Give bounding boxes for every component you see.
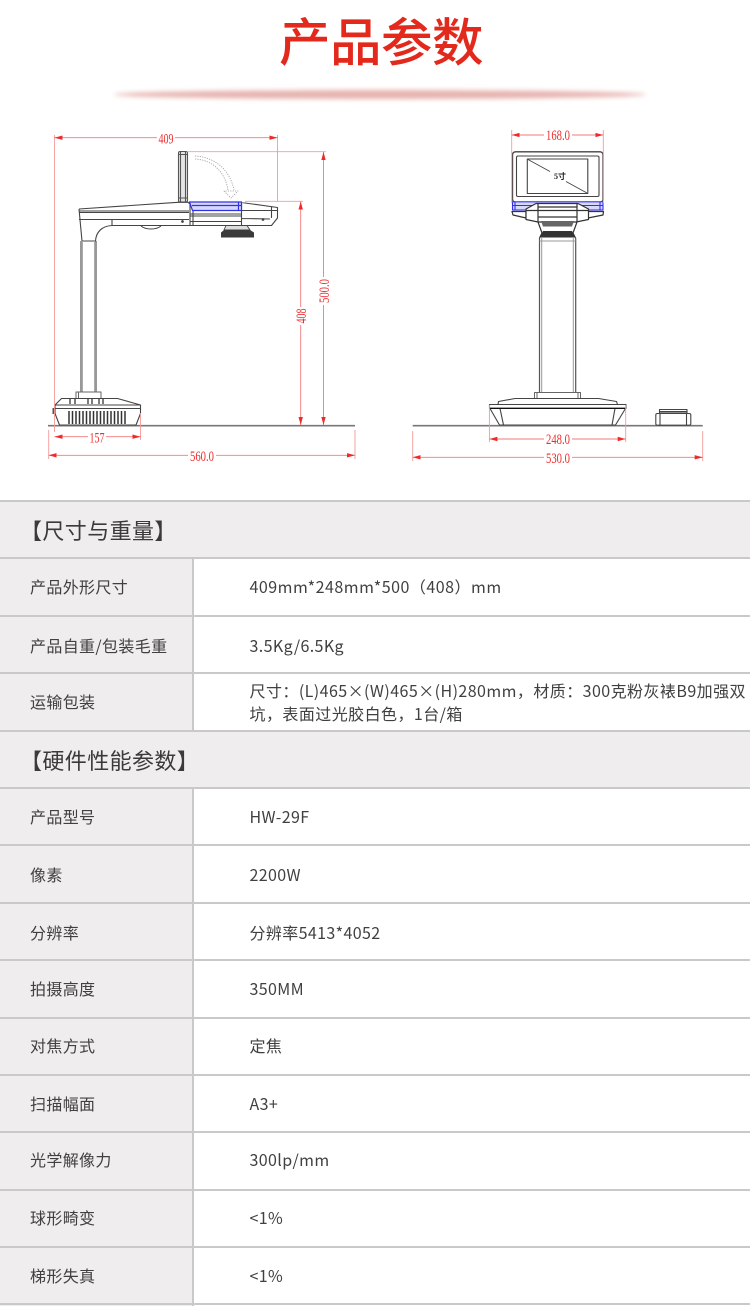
row: product dimensions: 409mm*248mm*500（408）mm (250, 574, 502, 598)
row: pixels: 2200W (250, 862, 301, 886)
row: weight: 3.5Kg/6.5Kg (250, 633, 344, 657)
row: optical resolution (0, 1131, 750, 1190)
row: pixels: 像素 (30, 862, 63, 886)
title: 产品参数 (279, 1, 483, 76)
table bottom edge (0, 1303, 750, 1306)
side view: blue highlighted hinge (190, 202, 242, 210)
front view drawing (413, 128, 703, 467)
dimension 168.0: 168.0 (546, 128, 570, 144)
front view: camera head (512, 204, 604, 238)
row: optical resolution: 光学解像力 (30, 1146, 112, 1170)
row: resolution: 分辨率5413*4052 (250, 920, 381, 944)
side view: camera lens (221, 226, 254, 238)
row: model: 产品型号 (30, 804, 95, 828)
front view: base (490, 398, 626, 425)
front view: dimensions (413, 129, 703, 464)
side view: column (76, 241, 101, 398)
row: product dimensions (0, 557, 750, 616)
row: packaging: 运输包装 (30, 688, 95, 712)
side view: base (54, 398, 140, 425)
row: weight: 产品自重/包装毛重 (30, 633, 167, 657)
side view: ground line (48, 425, 355, 427)
side view: folding monitor (178, 152, 188, 202)
side view: dimensions (49, 131, 355, 462)
section heading: hardware parameters: 【硬件性能参数】 (20, 744, 199, 776)
dimension 408: 408 (294, 308, 310, 324)
front view: ground line (413, 425, 703, 427)
side view: arm (79, 202, 278, 241)
dimension 409: 409 (158, 132, 174, 148)
row: scan size (0, 1074, 750, 1132)
side view drawing (48, 131, 355, 465)
front view: blue highlighted hinge (512, 202, 603, 210)
row: focus mode: 定焦 (250, 1033, 282, 1057)
row: weight (0, 615, 750, 673)
row: pixels (0, 844, 750, 903)
row: spherical distortion (0, 1189, 750, 1247)
side view: fold arrow (195, 156, 238, 198)
row: product dimensions: 产品外形尺寸 (30, 574, 128, 598)
row: shooting height: 350MM (250, 976, 304, 1000)
dimension 530.0: 530.0 (546, 451, 570, 467)
dimension 248.0: 248.0 (546, 432, 570, 448)
front view: small remote device (656, 410, 691, 425)
row: model: HW-29F (250, 804, 309, 828)
row: optical resolution: 300lp/mm (250, 1146, 330, 1170)
front view: lens (540, 221, 576, 238)
technical drawings (48, 128, 704, 467)
row: focus mode (0, 1017, 750, 1075)
row: resolution: 分辨率 (30, 920, 79, 944)
front view: column (534, 238, 580, 398)
dimension 560.0: 560.0 (190, 449, 214, 465)
title underline glow (114, 90, 646, 99)
row: model (0, 787, 750, 845)
row: packaging: 尺寸：(L)465×(W)465×(H)280mm，材质：300克粉灰裱B9加强双 (250, 678, 746, 702)
row: scan size: 扫描幅面 (30, 1091, 95, 1115)
row: shooting height (0, 959, 750, 1018)
section heading: size and weight: 【尺寸与重量】 (20, 514, 177, 546)
row: spherical distortion: 球形畸变 (30, 1205, 95, 1229)
row: packaging: 坑，表面过光胶白色，1台/箱 (250, 700, 463, 724)
dimension 500.0: 500.0 (317, 279, 333, 303)
front view: 5 inch label: 5寸 (554, 171, 566, 181)
row: focus mode: 对焦方式 (30, 1033, 95, 1057)
row: trapezoid distortion: 梯形失真 (30, 1263, 95, 1287)
row: packaging (0, 672, 750, 731)
row: trapezoid distortion (0, 1246, 750, 1304)
row: resolution (0, 902, 750, 960)
section heading: size and weight (0, 500, 750, 558)
section heading: hardware parameters (0, 730, 750, 788)
row: shooting height: 拍摄高度 (30, 976, 95, 1000)
front view: monitor (512, 152, 603, 202)
row: scan size: A3+ (250, 1091, 278, 1115)
dimension 157: 157 (90, 430, 105, 446)
row: trapezoid distortion: <1% (250, 1263, 283, 1287)
row: spherical distortion: <1% (250, 1205, 283, 1229)
